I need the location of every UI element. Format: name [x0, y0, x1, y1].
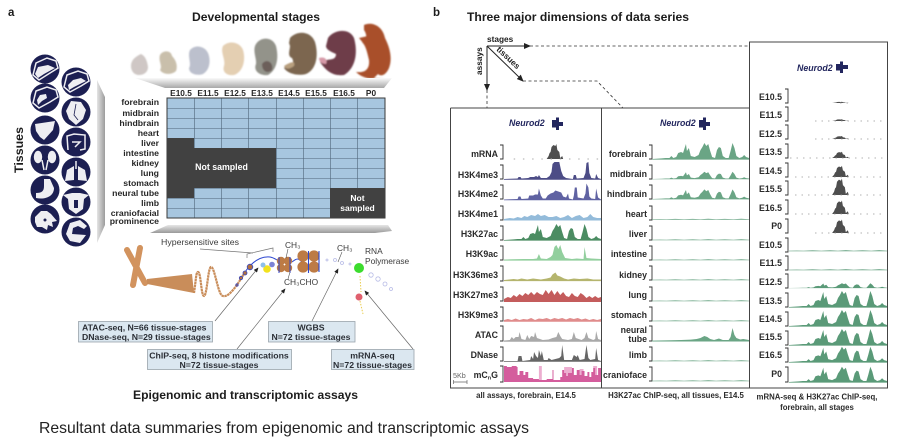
track H3K9ac	[504, 245, 601, 261]
scale bar 5Kb: 5Kb	[453, 371, 466, 380]
stage labels: E16.5	[333, 88, 355, 98]
label CH3CHO: CH₃CHO	[284, 277, 319, 287]
callout mRNA: mRNA-seq	[350, 350, 395, 360]
gene label Neurod2: Neurod2	[660, 118, 696, 128]
stage labels mRNA	[759, 92, 782, 231]
track labels: ATAC	[475, 330, 499, 340]
stage labels H3K27ac: E10.5	[759, 240, 782, 250]
icon: heart	[62, 98, 90, 126]
track mRNA	[514, 144, 601, 159]
stage labels H3K27ac: E12.5	[759, 277, 782, 287]
track H3K27me3	[504, 290, 601, 302]
panel: all tissues	[603, 118, 749, 381]
sampling grid	[167, 98, 385, 218]
tissue labels: tube	[628, 334, 647, 344]
track labels: n	[488, 376, 492, 382]
stage labels mRNA: E13.5	[759, 147, 782, 157]
stage labels mRNA: E10.5	[759, 92, 782, 102]
tissue labels: heart	[625, 209, 647, 219]
stage labels: E11.5	[197, 88, 219, 98]
gene label Neurod2: Neurod2	[797, 63, 833, 73]
tissue tracks	[652, 143, 749, 381]
heading: Tissues: Tissues	[12, 127, 26, 173]
tissue row labels: craniofacial	[111, 208, 159, 218]
gene label Neurod2	[509, 118, 563, 130]
panel: all assays	[453, 118, 601, 384]
stage labels H3K27ac: E11.5	[759, 258, 782, 268]
label RNA polymerase: Polymerase	[365, 256, 410, 266]
stage labels H3K27ac	[759, 240, 782, 379]
track labels	[453, 149, 499, 382]
tissue row labels: limb	[141, 198, 159, 208]
axis stages	[487, 45, 530, 47]
track labels: H3K27ac	[461, 229, 498, 239]
RNA polymerase ball	[354, 263, 364, 273]
track mC	[504, 366, 601, 382]
tissue labels: cranioface	[603, 370, 647, 380]
track labels: H3K9ac	[466, 249, 498, 259]
track H3K4me1	[504, 214, 601, 220]
track H3K4me3	[504, 162, 601, 180]
tissue row labels: neural tube	[112, 188, 159, 198]
callout ATAC DNase: ATAC-seq, N=66 tissue-stages	[82, 322, 207, 332]
embryo E16.5	[320, 31, 356, 75]
track H3K27ac	[504, 224, 601, 241]
tissue row labels: midbrain	[122, 108, 159, 118]
arrow mRNA	[365, 291, 413, 349]
label not sampled: Not sampled	[195, 162, 248, 172]
panel: all stages	[759, 62, 887, 383]
icon: limb	[30, 204, 60, 234]
stage labels H3K27ac: E14.5	[759, 314, 782, 324]
tissue row labels: forebrain	[121, 97, 159, 107]
arrow ATAC	[215, 268, 258, 321]
panel frames	[450, 42, 888, 388]
callout WGBS	[268, 322, 355, 342]
stage labels: P0	[366, 88, 376, 98]
heading: Epigenomic and transcriptomic assays: Epigenomic and transcriptomic assays	[133, 390, 358, 402]
tissue row labels: prominence	[110, 216, 159, 226]
callout WGBS: N=72 tissue-stages	[272, 332, 351, 342]
tissue row labels: stomach	[123, 178, 159, 188]
tissue labels: hindbrain	[607, 189, 647, 199]
stage labels mRNA: E16.5	[759, 203, 782, 213]
prism band under grid	[150, 225, 392, 233]
track labels: H3K4me2	[458, 189, 498, 199]
stage labels: E15.5	[305, 88, 327, 98]
not sampled block late stages	[330, 188, 385, 218]
gene label Neurod2: Neurod2	[509, 118, 545, 128]
label CH3: CH₃	[285, 240, 301, 250]
embryo E15.5	[284, 33, 317, 75]
stage labels: E10.5	[170, 88, 192, 98]
prism band beside tissues	[97, 80, 105, 243]
label assays: assays	[474, 47, 484, 75]
stage labels H3K27ac: P0	[771, 369, 782, 379]
track H3K4me2	[504, 184, 601, 200]
tissue labels: stomach	[611, 310, 647, 320]
arrow WGBS	[312, 269, 338, 321]
label not sampled late: Not	[350, 193, 365, 203]
nucleosome 2	[297, 250, 320, 273]
heading: Developmental stages: Developmental stages	[192, 10, 320, 24]
gene label Neurod2	[797, 62, 848, 73]
panel label a: a	[8, 7, 15, 19]
small nucleosomes	[236, 264, 253, 286]
stage labels H3K27ac: E15.5	[759, 332, 782, 342]
icon: hindbrain	[62, 68, 90, 96]
bottom caption: Resultant data summaries from epigenomic and transcriptomic assays	[39, 420, 529, 437]
stage labels mRNA: E11.5	[759, 110, 782, 120]
tissue icons	[30, 54, 90, 246]
stage labels mRNA: E15.5	[759, 184, 782, 194]
label RNA polymerase	[365, 246, 410, 266]
callout WGBS: WGBS	[297, 322, 325, 332]
track H3K9me3	[504, 318, 601, 322]
panel label b: b	[433, 7, 440, 19]
tissue labels: neural	[621, 325, 647, 335]
stage labels mRNA: E14.5	[759, 166, 782, 176]
caption middle panel: H3K27ac ChIP-seq, all tissues, E14.5	[608, 391, 744, 400]
tissue labels: kidney	[619, 270, 647, 280]
callout ATAC DNase: DNase-seq, N=29 tissue-stages	[82, 332, 211, 342]
icon: lung	[62, 158, 90, 186]
track labels: mC	[474, 370, 488, 380]
embryo E10.5	[131, 54, 148, 75]
caption right panel: forebrain, all stages	[780, 403, 854, 412]
icon: neural tube	[62, 188, 90, 216]
callout ChIP: ChIP-seq, 8 histone modifications	[149, 350, 289, 360]
icon: liver	[30, 116, 60, 144]
axis assays	[486, 46, 488, 90]
stage labels H3K27ac: E13.5	[759, 296, 782, 306]
track labels: H3K4me3	[458, 170, 498, 180]
callout ATAC DNase	[78, 322, 212, 342]
tissue labels: lung	[628, 290, 647, 300]
axis tissues	[487, 46, 523, 81]
mRNA tracks	[790, 102, 885, 233]
icon: intestine	[62, 128, 90, 156]
heading: Three major dimensions: Three major dimensions of data series	[467, 10, 689, 24]
axes diagram	[474, 34, 749, 108]
tissue row labels: intestine	[123, 148, 159, 158]
track labels: G	[491, 370, 498, 380]
tissue row labels: kidney	[131, 158, 159, 168]
ribosome ball	[356, 294, 362, 300]
tissue row labels: lung	[141, 168, 159, 178]
embryo E12.5	[189, 46, 210, 75]
stage labels	[170, 88, 376, 98]
callout ChIP	[148, 350, 292, 370]
caption right panel	[757, 392, 877, 412]
track labels: H3K4me1	[458, 209, 498, 219]
icon: midbrain	[30, 84, 60, 112]
label RNA polymerase: RNA	[365, 246, 383, 256]
bracket	[200, 248, 273, 258]
tissue row labels: heart	[138, 128, 159, 138]
track H3K36me3	[504, 272, 601, 281]
track labels: H3K27me3	[453, 290, 498, 300]
icon: forebrain	[30, 54, 60, 84]
stage labels: E12.5	[224, 88, 246, 98]
track DNase	[504, 345, 601, 362]
track ATAC	[504, 331, 601, 342]
chromosome	[127, 248, 145, 285]
nucleosome 1	[277, 257, 292, 273]
stage labels: E13.5	[251, 88, 273, 98]
label CH3 second: CH₃	[337, 243, 353, 253]
stage labels mRNA: P0	[771, 221, 782, 231]
track labels: H3K9me3	[458, 310, 498, 320]
embryo E11.5	[160, 51, 177, 74]
label stages: stages	[487, 34, 514, 44]
scale bar 5Kb	[453, 371, 467, 384]
not sampled block early stages	[167, 138, 276, 198]
stage labels H3K27ac: E16.5	[759, 350, 782, 360]
embryo E14.5	[254, 39, 277, 75]
stage labels: E14.5	[278, 88, 300, 98]
transcript	[360, 276, 363, 314]
arrow ChIP	[237, 289, 285, 349]
tissue labels: forebrain	[609, 149, 647, 159]
track labels: DNase	[471, 350, 498, 360]
hypersensitive factors	[260, 262, 275, 273]
track labels: H3K36me3	[453, 270, 498, 280]
embryo images	[131, 24, 391, 82]
caption left panel: all assays, forebrain, E14.5	[476, 391, 577, 400]
tissue labels: limb	[629, 350, 648, 360]
chromatin diagram	[127, 237, 410, 314]
embryo E13.5	[222, 43, 244, 75]
callout mRNA	[332, 350, 414, 370]
label tissues: tissues	[495, 44, 523, 71]
icon: stomach	[30, 176, 60, 204]
label not sampled late: sampled	[340, 203, 375, 213]
tissue labels: intestine	[611, 249, 647, 259]
prism band under embryos	[135, 78, 392, 88]
icon: kidney	[30, 146, 60, 174]
callout ChIP: N=72 tissue-stages	[180, 360, 259, 370]
icon: craniofacial prominence	[62, 218, 90, 246]
tissue labels	[603, 149, 648, 380]
chromatin fibre	[147, 274, 194, 293]
gene label Neurod2	[660, 118, 710, 130]
caption right panel: mRNA-seq & H3K27ac ChIP-seq,	[757, 392, 877, 402]
tissue row labels: hindbrain	[119, 118, 159, 128]
unwrapped DNA	[326, 258, 392, 290]
tissue labels: liver	[629, 229, 648, 239]
stage labels mRNA: E12.5	[759, 129, 782, 139]
embryo P0	[356, 24, 391, 78]
track labels: mRNA	[471, 149, 499, 159]
callout mRNA: N=72 tissue-stages	[333, 360, 412, 370]
tissue labels: midbrain	[610, 169, 647, 179]
H3K27ac tracks	[789, 250, 887, 383]
tissue row labels: liver	[141, 138, 160, 148]
label hypersensitive sites: Hypersensitive sites	[161, 237, 239, 247]
tissue row labels	[110, 97, 160, 226]
label not sampled late	[340, 193, 375, 213]
